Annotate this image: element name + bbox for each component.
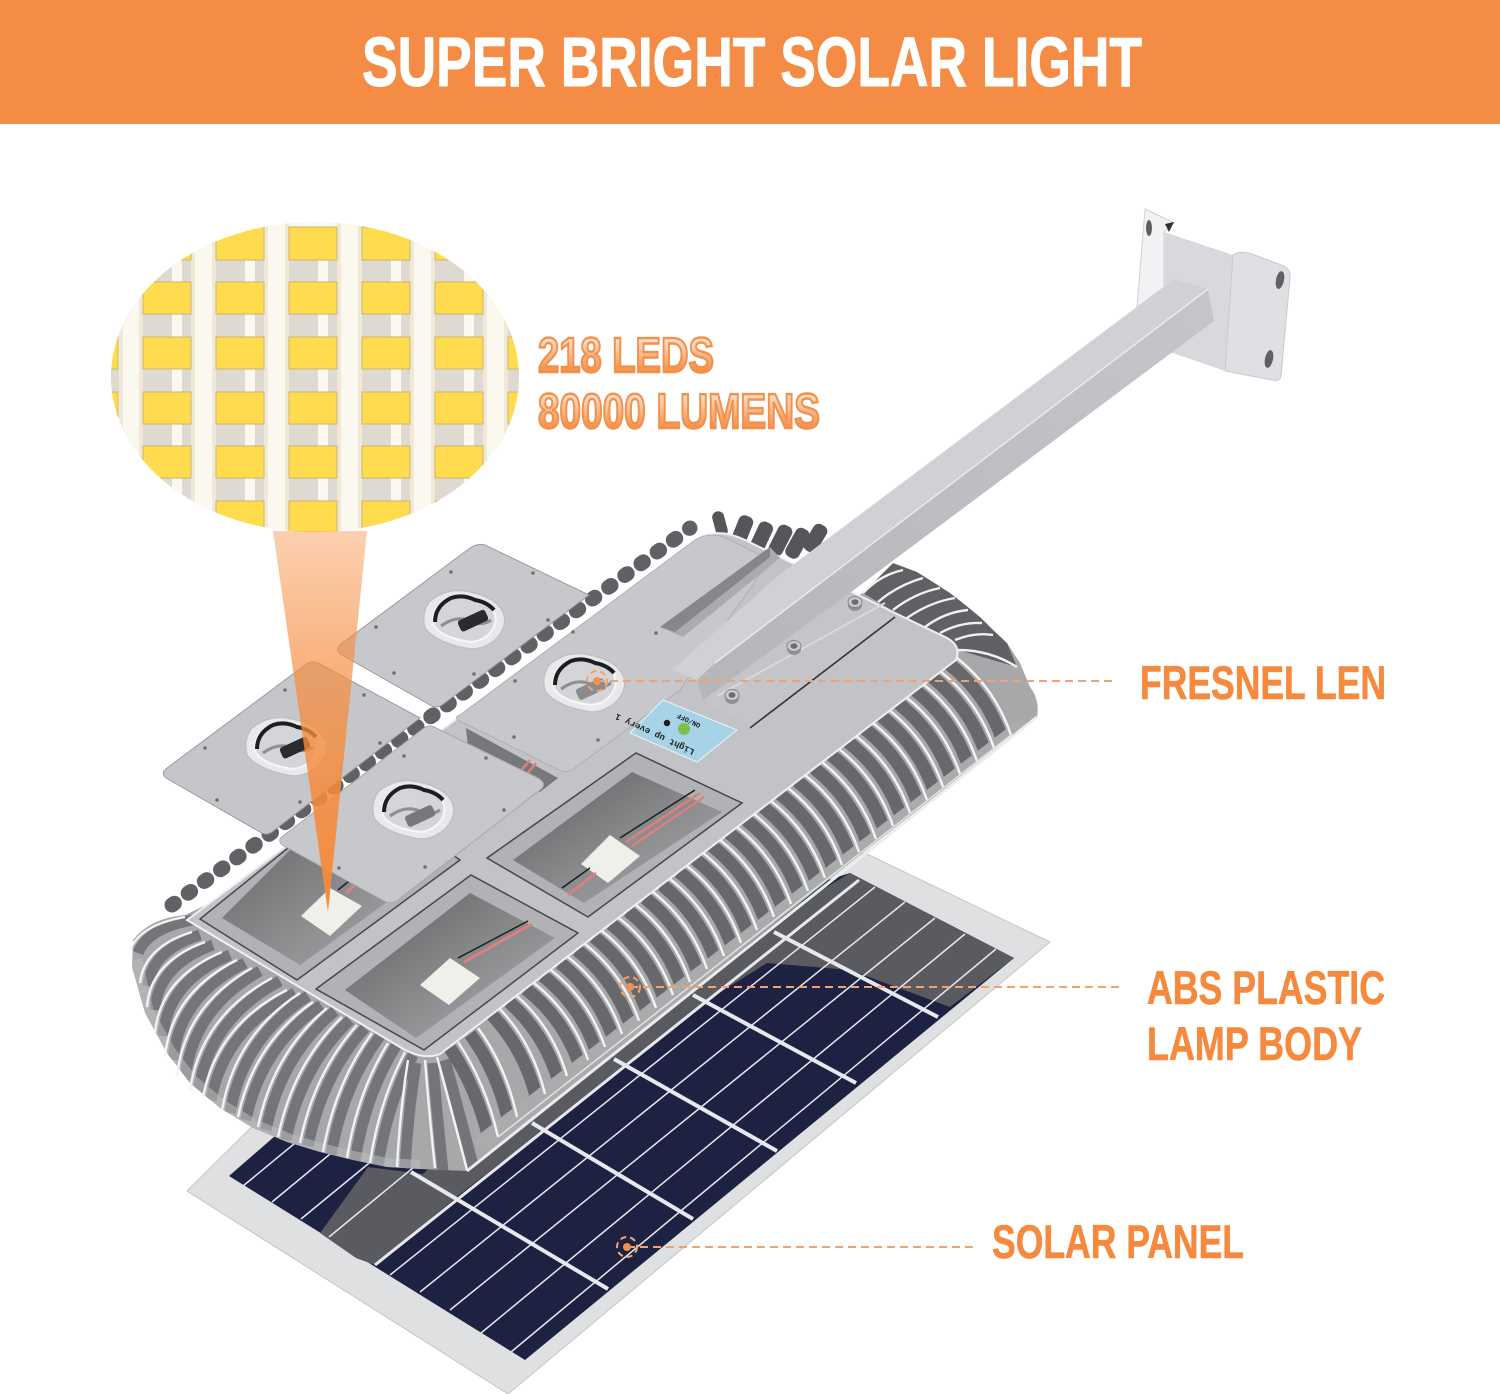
lens: back left bbox=[424, 590, 505, 649]
arm top face bbox=[672, 279, 1208, 680]
back plate lower left bbox=[163, 662, 420, 834]
fin housing bbox=[130, 563, 1038, 1173]
well: lower middle bbox=[316, 875, 578, 1050]
back fins bbox=[172, 510, 830, 905]
well: upper right bbox=[487, 753, 742, 917]
lens: front lower bbox=[373, 780, 454, 839]
80000 LUMENS: 80000 LUMENS bbox=[538, 385, 820, 439]
top face bbox=[187, 533, 958, 1056]
blue control label bbox=[613, 700, 737, 762]
screw marks bbox=[203, 570, 658, 870]
arm side face bbox=[697, 289, 1214, 700]
LED chips bbox=[111, 226, 519, 532]
LED spec text bbox=[538, 329, 820, 439]
solar panel bbox=[187, 853, 1050, 1394]
well: left bbox=[200, 790, 460, 980]
callout: fresnel len: FRESNEL LEN bbox=[1140, 656, 1386, 709]
callout: solar panel: SOLAR PANEL bbox=[992, 1215, 1244, 1268]
blue control label: ON/OFF bbox=[676, 711, 702, 729]
blue control label: Light up every 1 bbox=[613, 711, 696, 756]
header banner bbox=[0, 0, 1500, 124]
front plate lower bbox=[280, 726, 544, 903]
wall bracket right flange bbox=[1225, 252, 1290, 380]
gray substrate bands bbox=[100, 260, 530, 501]
callout: fresnel len bbox=[587, 656, 1386, 709]
spotlight beam bbox=[273, 531, 367, 912]
bracket holes bbox=[1146, 220, 1286, 369]
clamp bolts bbox=[725, 596, 862, 704]
cell dividers bbox=[243, 880, 996, 1352]
callout: solar panel bbox=[617, 1215, 1244, 1268]
mounting arm bbox=[672, 209, 1290, 728]
back plate left bbox=[338, 544, 589, 707]
front plate right bbox=[456, 535, 770, 772]
callout: lamp body: ABS PLASTIC bbox=[1147, 961, 1385, 1014]
lamp body bbox=[130, 510, 1038, 1173]
callout: lamp body bbox=[620, 961, 1385, 1070]
callout: lamp body: LAMP BODY bbox=[1147, 1017, 1362, 1070]
wall bracket centre plate bbox=[1164, 232, 1233, 371]
vertical traces bbox=[123, 260, 504, 501]
panel reflection bbox=[320, 873, 1014, 1265]
lens: back lower left bbox=[246, 717, 327, 776]
solar cells bbox=[229, 873, 1014, 1360]
LED close-up circle bbox=[111, 222, 519, 532]
clamp bracket bbox=[703, 593, 895, 728]
mounting channel bbox=[660, 547, 780, 637]
wall bracket left flange bbox=[1137, 209, 1174, 307]
lens: front right bbox=[544, 653, 625, 712]
title: SUPER BRIGHT SOLAR LIGHT bbox=[362, 23, 1142, 101]
wire recess bbox=[466, 728, 558, 792]
218 LEDS: 218 LEDS bbox=[538, 329, 714, 383]
